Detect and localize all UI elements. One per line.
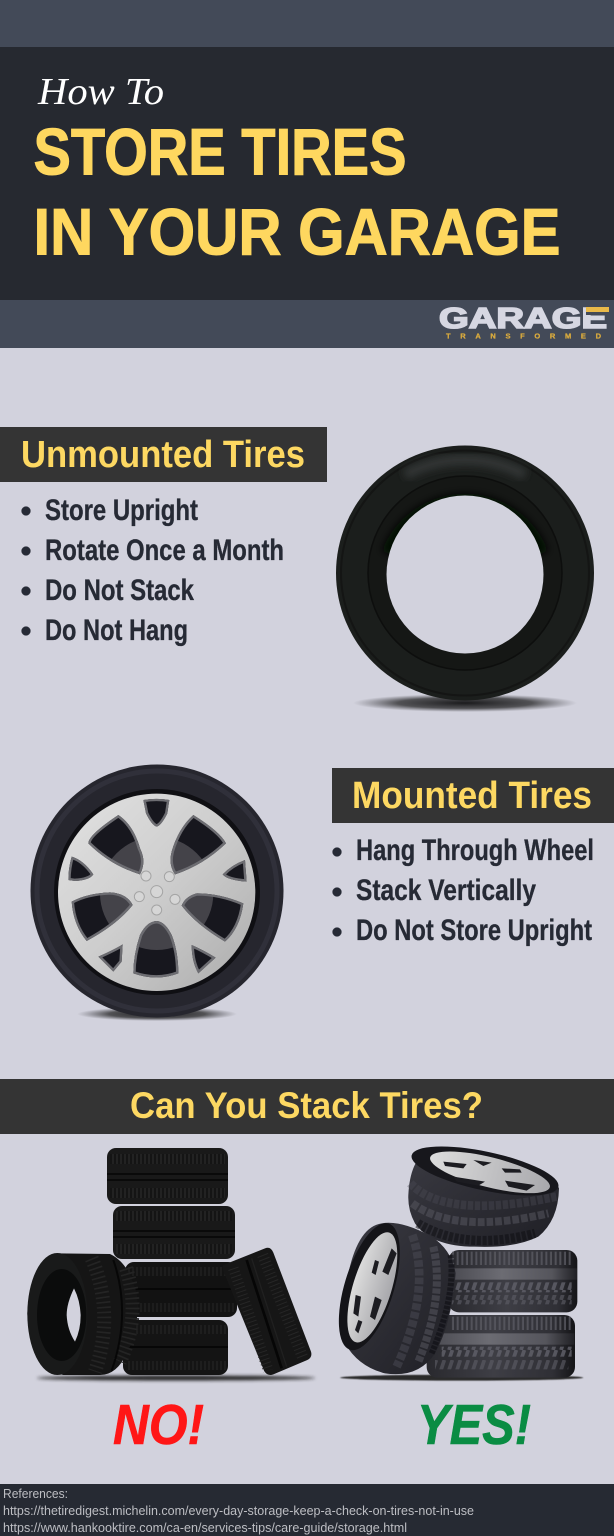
illustration: correct stack bbox=[326, 1136, 583, 1381]
footer: references: References: bbox=[3, 1486, 68, 1501]
bullet list: Rotate Once a Month bbox=[45, 534, 284, 567]
heading bar: Can You Stack Tires? bbox=[130, 1085, 483, 1126]
leaning tire bbox=[223, 1248, 311, 1375]
lower stacked tire bbox=[427, 1315, 575, 1378]
front wheel bbox=[326, 1216, 456, 1374]
bullet list: Do Not Stack bbox=[45, 574, 194, 607]
logo: Garage Transformed: GARAGE bbox=[439, 303, 607, 335]
heading bar: Unmounted Tires bbox=[21, 434, 305, 476]
footer: references: https://www.hankooktire.com/ca-en/services-tips/care-guide/storage.html bbox=[3, 1520, 407, 1535]
bullet list bbox=[22, 494, 284, 647]
title line 2: IN YOUR GARAGE bbox=[34, 194, 560, 268]
panel: mounted tires bbox=[30, 764, 614, 1021]
upper stacked tire bbox=[448, 1250, 577, 1312]
icon: unmounted tire bbox=[336, 446, 594, 712]
bullet list: Store Upright bbox=[45, 494, 198, 527]
bottom band bbox=[0, 300, 614, 348]
bullet list: Stack Vertically bbox=[356, 874, 536, 907]
label: YES!: YES! bbox=[417, 1393, 531, 1457]
footer: references bbox=[0, 1484, 614, 1536]
header panel bbox=[0, 0, 614, 348]
footer: references: https://thetiredigest.michelin.com/every-day-storage-keep-a-check-on-tires-not-in-use bbox=[3, 1503, 474, 1518]
logo: Garage Transformed bbox=[439, 303, 609, 340]
panel: can you stack tires bbox=[0, 1079, 614, 1457]
illustration: wrong stack bbox=[27, 1148, 315, 1380]
panel: unmounted tires bbox=[0, 427, 594, 712]
top band bbox=[0, 0, 614, 47]
front tire bbox=[27, 1253, 138, 1375]
top wheel bbox=[408, 1136, 562, 1247]
title background bbox=[0, 47, 614, 300]
label: NO!: NO! bbox=[113, 1393, 204, 1457]
icon: mounted wheel bbox=[30, 764, 284, 1021]
title line 1: STORE TIRES bbox=[34, 114, 406, 188]
bullet list: Do Not Hang bbox=[45, 614, 188, 647]
bullet list bbox=[332, 834, 594, 947]
heading bar: Mounted Tires bbox=[352, 775, 592, 817]
kicker: How To: How To bbox=[37, 71, 164, 113]
heading bar bbox=[0, 1079, 614, 1134]
logo: Garage Transformed: TRANSFORMED bbox=[446, 332, 602, 340]
